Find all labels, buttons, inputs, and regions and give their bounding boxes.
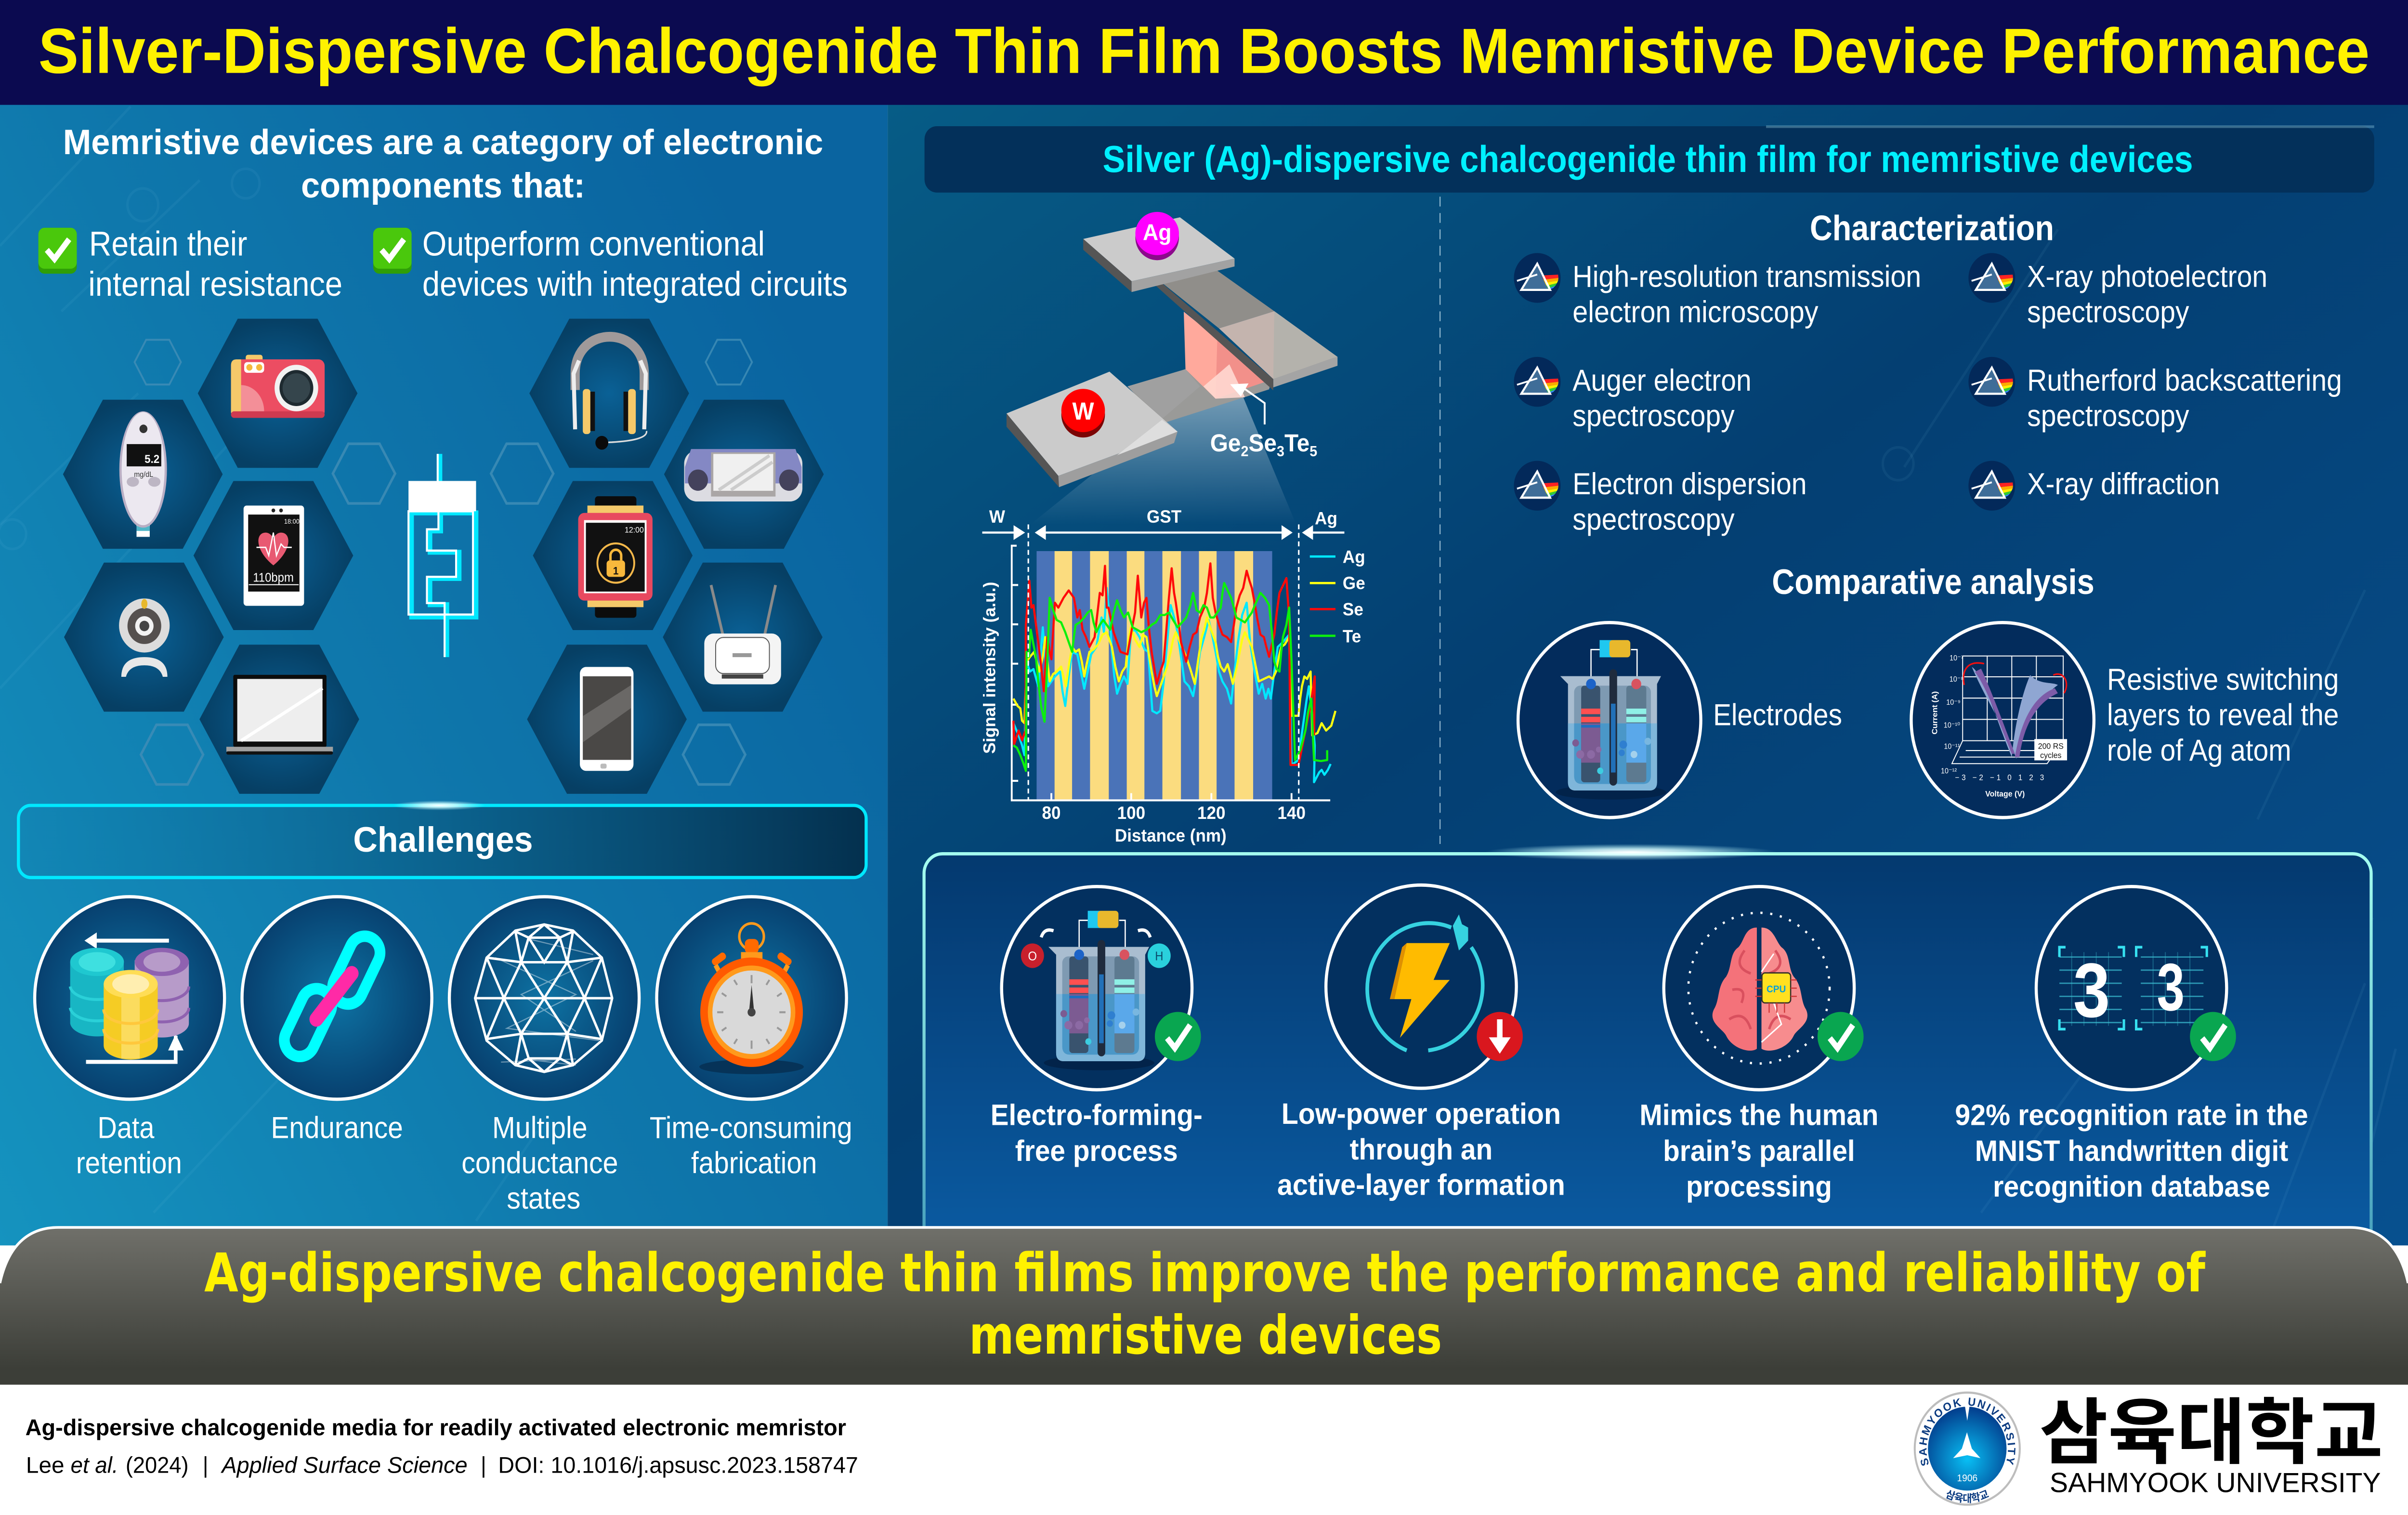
decorative circuit traces: [0, 106, 2395, 1229]
icon: handheld console hexagon: [664, 400, 824, 549]
item: XRD: [1968, 461, 2220, 511]
chart axis labels: [980, 582, 1306, 845]
chart axis labels: 120: [1197, 803, 1226, 823]
icon: headphones hexagon: [529, 319, 689, 468]
item: EDS: spectroscopy: [1572, 502, 1735, 536]
diagram: W/GST/Ag device: [1007, 212, 1337, 525]
chart: I-V curves: Current (A): [1931, 691, 1939, 735]
chart top annotations: Ag: [1315, 508, 1337, 528]
electrode: Ag: [1135, 212, 1179, 260]
chart: I-V curves: −3 −2 −1 0 1 2 3: [1955, 774, 2044, 782]
heading: challenges: Challenges: [353, 820, 533, 859]
icon: glucose meter hexagon: [63, 400, 222, 549]
electrode: Ag: Ag: [1143, 219, 1171, 245]
chart axis labels: 140: [1278, 803, 1306, 823]
chart legend: [1310, 546, 1365, 646]
result: brain-like processing: processing: [1686, 1170, 1832, 1203]
result: electro-forming-free: Electro-forming-: [991, 1098, 1203, 1132]
icon: webcam hexagon: [64, 563, 224, 711]
item: EDS: [1514, 461, 1807, 536]
icon: camera hexagon: [198, 319, 357, 468]
result: brain-like processing: [1639, 886, 1879, 1203]
result: low-power operation: active-layer formation: [1277, 1168, 1565, 1201]
footer background: [0, 1385, 2408, 1515]
arrow and label: Ge2Se3Te5: 5: [1309, 443, 1317, 460]
result: brain-like processing: Mimics the human: [1639, 1098, 1879, 1132]
logo: university wordmark: 삼육대학교: [2039, 1374, 2383, 1478]
result: electro-forming-free: free process: [1015, 1134, 1178, 1168]
chart: I-V curves: Voltage (V): [1985, 790, 2025, 798]
result: MNIST recognition: MNIST handwritten digit: [1975, 1134, 2289, 1168]
citation: [26, 1414, 858, 1478]
chart: I-V curves: 10⁻⁷: [1950, 655, 1963, 662]
icon: glucose meter hexagon: mg/dL: [134, 471, 153, 479]
result: low-power operation: [1277, 885, 1565, 1201]
result: low-power operation: through an: [1350, 1133, 1492, 1166]
chart axis labels: 100: [1117, 803, 1145, 823]
logo: Sahmyook University seal: 삼육대학교: [1946, 1489, 1989, 1503]
text: challenge labels: conductance: [461, 1146, 618, 1180]
chart: I-V curves: 10⁻⁸: [1950, 676, 1963, 684]
electrode: W: [1061, 389, 1105, 437]
result: low-power operation: Low-power operation: [1282, 1097, 1561, 1130]
item: AES: Auger electron: [1572, 363, 1752, 397]
result: electro-forming-free: [991, 886, 1203, 1168]
chart axes: [1012, 546, 1330, 800]
text: retain resistance: Retain their: [89, 224, 247, 263]
chart legend: Te: [1343, 626, 1361, 646]
comparative: resistive switching: role of Ag atom: [2107, 733, 2291, 767]
text: challenge labels: Multiple: [492, 1111, 588, 1145]
arrow and label: Ge2Se3Te5: [1210, 383, 1317, 460]
icon: router hexagon: [663, 563, 823, 711]
chart axis labels: 80: [1042, 803, 1061, 823]
text: challenge labels: states: [507, 1181, 580, 1215]
arrow and label: Ge2Se3Te5: Se: [1249, 429, 1277, 457]
result: brain-like processing: brain’s parallel: [1663, 1134, 1855, 1168]
icon: memristor symbol: [408, 454, 476, 657]
decorative hexagon outlines: [134, 340, 752, 784]
chart: I-V curves: 10⁻¹¹: [1944, 743, 1960, 751]
logo: university wordmark: SAHMYOOK UNIVERSITY: [2050, 1467, 2381, 1498]
chart: I-V curves: 10⁻⁹: [1946, 698, 1961, 707]
challenge: multiple conductance states: [449, 896, 639, 1099]
heading: memristive devices: Memristive devices are a category of electronic: [63, 123, 823, 162]
panel: memristive devices definition: [39, 123, 848, 303]
title bar: Silver-Dispersive Chalcogenide Thin Film Boosts Memristive Device Performance: [39, 16, 2369, 87]
text: challenge labels: fabrication: [691, 1146, 817, 1180]
title bar: [0, 0, 2408, 105]
result: brain-like processing: CPU: [1767, 984, 1786, 995]
citation: et al.: [71, 1452, 118, 1478]
icon: heart-rate phone hexagon: 18:00: [284, 518, 300, 525]
chart legend: Ge: [1343, 573, 1365, 593]
icon: smartwatch hexagon: [533, 481, 693, 630]
result: MNIST recognition: 3: [2157, 949, 2185, 1025]
chart top annotations: W: [989, 506, 1006, 527]
citation: Lee: [26, 1452, 65, 1478]
citation: |: [203, 1452, 209, 1478]
icon: laptop hexagon: [199, 645, 359, 794]
text: retain resistance: [88, 224, 342, 303]
comparative: electrodes: [1518, 622, 1842, 817]
item: XRD: X-ray diffraction: [2027, 467, 2220, 501]
heading: memristive devices: [63, 123, 823, 205]
citation: Ag-dispersive chalcogenide media for readily activated electronic memristor: [26, 1414, 846, 1440]
chart axis labels: Signal intensity (a.u.): [980, 582, 999, 754]
icon: glucose meter hexagon: 5.2: [144, 452, 159, 465]
item: AES: [1514, 357, 1752, 433]
list: characterization techniques: [1514, 253, 2342, 536]
arrow and label: Ge2Se3Te5: Te: [1284, 429, 1309, 457]
comparative: resistive switching: [1911, 622, 2339, 817]
challenge: endurance: [242, 896, 432, 1099]
heading: comparative analysis: Comparative analysis: [1772, 563, 2094, 602]
text: challenge labels: Time-consuming: [650, 1111, 852, 1145]
banner: conclusion: [0, 1227, 2408, 1385]
challenge: data retention: [35, 896, 224, 1099]
chart top annotations: GST: [1147, 506, 1181, 527]
item: HRTEM: High-resolution transmission: [1572, 260, 1921, 293]
result: MNIST recognition: 3: [2073, 947, 2110, 1033]
result: MNIST recognition: 92% recognition rate in the: [1955, 1098, 2308, 1132]
heading: challenges: [18, 801, 866, 878]
text: challenge labels: Data: [97, 1111, 155, 1145]
icon: smartwatch hexagon: 1: [613, 565, 619, 577]
electrode: W: W: [1072, 397, 1094, 425]
result: electro-forming-free: H: [1155, 950, 1164, 963]
arrow and label: Ge2Se3Te5: Ge: [1210, 429, 1241, 457]
banner: conclusion: memristive devices: [969, 1305, 1442, 1367]
item: RBS: Rutherford backscattering: [2027, 363, 2342, 397]
citation: DOI: 10.1016/j.apsusc.2023.158747: [498, 1452, 858, 1478]
logo: Sahmyook University seal: SAHMYOOK UNIVERSITY: [1919, 1397, 2015, 1466]
panel: results: [924, 844, 2371, 1296]
icon: heart-rate phone hexagon: 110bpm: [253, 571, 294, 585]
result: electro-forming-free: O: [1028, 950, 1037, 963]
logo: Sahmyook University seal: 1906: [1957, 1473, 1977, 1484]
result: MNIST recognition: [1955, 886, 2308, 1203]
text: challenge labels: [76, 1111, 852, 1215]
chart: I-V curves: [1931, 655, 2067, 798]
chart legend: Ag: [1343, 546, 1365, 567]
chart: I-V curves: 10⁻¹²: [1941, 767, 1957, 776]
comparative: resistive switching: Resistive switching: [2107, 662, 2339, 697]
item: XPS: X-ray photoelectron: [2027, 260, 2267, 293]
icon: smartphone hexagon: [527, 645, 687, 794]
chart: signal intensity vs distance: [980, 506, 1365, 845]
citation: Applied Surface Science: [220, 1452, 468, 1478]
chart legend: Se: [1343, 599, 1363, 619]
item: EDS: Electron dispersion: [1572, 467, 1807, 501]
chart top annotations: [982, 506, 1344, 800]
challenge: time-consuming fabrication: [657, 896, 847, 1099]
text: challenge labels: Endurance: [271, 1111, 403, 1145]
heading: silver-dispersive film: [925, 125, 2374, 193]
chart axis labels: Distance (nm): [1115, 825, 1227, 845]
logo: Sahmyook University seal: [1914, 1391, 2021, 1506]
icon: green check 1: [39, 228, 77, 274]
comparative: electrodes: Electrodes: [1713, 698, 1842, 732]
comparative: resistive switching: layers to reveal the: [2107, 698, 2339, 732]
item: HRTEM: electron microscopy: [1572, 295, 1819, 329]
panel: left background: [0, 98, 888, 1245]
arrow and label: Ge2Se3Te5: 3: [1277, 443, 1284, 460]
text: challenge labels: retention: [76, 1146, 182, 1180]
chart: I-V curves: 10⁻¹⁰: [1944, 722, 1960, 730]
icon: green check 2: [373, 228, 412, 274]
item: XPS: [1968, 253, 2267, 329]
text: outperform conventional: Outperform conventional: [422, 224, 765, 263]
chart: I-V curves: 200 RS: [2038, 742, 2064, 751]
chart stripes: [1036, 551, 1272, 799]
result: MNIST recognition: recognition database: [1993, 1170, 2270, 1203]
text: outperform conventional: devices with integrated circuits: [422, 264, 848, 303]
item: HRTEM: [1514, 253, 1921, 329]
heading: silver-dispersive film: Silver (Ag)-dispersive chalcogenide thin film for memristive devices: [1103, 138, 2193, 181]
text: retain resistance: internal resistance: [88, 264, 342, 303]
panel: right background: [888, 98, 2408, 1245]
heading: characterization: Characterization: [1810, 209, 2054, 248]
heading: memristive devices: components that:: [301, 166, 585, 205]
chart series: [1013, 564, 1335, 782]
citation: (2024): [126, 1452, 189, 1478]
chart: I-V curves: cycles: [2040, 751, 2061, 760]
icon: heart-rate phone hexagon: [194, 481, 353, 630]
item: AES: spectroscopy: [1572, 399, 1735, 433]
icon: smartwatch hexagon: 12:00: [625, 526, 644, 535]
text: outperform conventional: [422, 224, 848, 303]
arrow and label: Ge2Se3Te5: 2: [1241, 443, 1249, 460]
item: XPS: spectroscopy: [2027, 295, 2189, 329]
item: RBS: spectroscopy: [2027, 399, 2189, 433]
item: RBS: [1968, 357, 2342, 433]
citation: |: [481, 1452, 486, 1478]
